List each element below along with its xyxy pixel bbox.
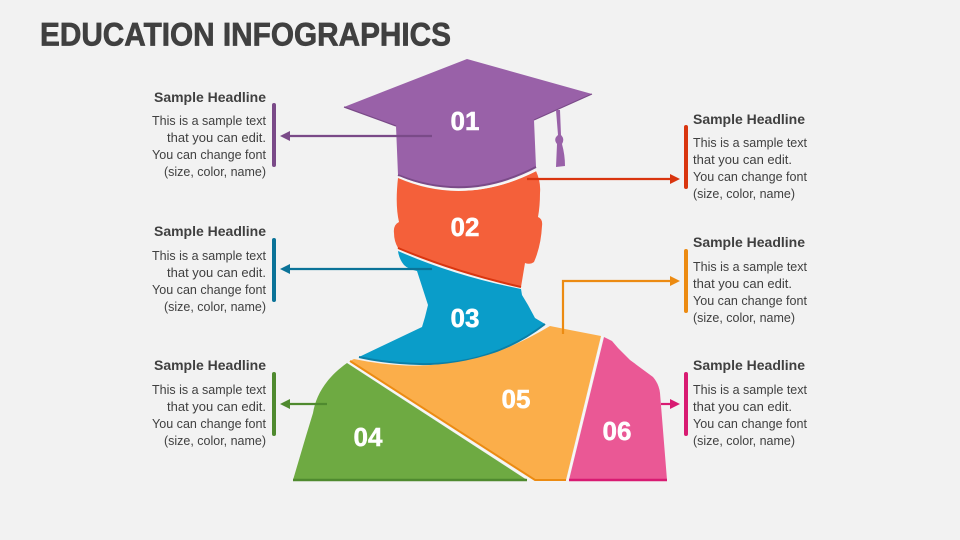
- text block 05: This is a sample text: [693, 259, 807, 274]
- text block 03: You can change font: [152, 282, 266, 297]
- text block 04: You can change font: [152, 416, 266, 431]
- text block 01: This is a sample text: [152, 113, 266, 128]
- text block 03: This is a sample text: [152, 248, 266, 263]
- arrow 03: [280, 264, 432, 274]
- text block 05: You can change font: [693, 293, 807, 308]
- segment 06: right shoulder: 06: [603, 416, 631, 446]
- text block 01: that you can edit.: [167, 130, 266, 145]
- arrow 02: [527, 174, 680, 184]
- segment 03: neck: [359, 251, 545, 364]
- text block 01: You can change font: [152, 147, 266, 162]
- text block 05: Sample Headline: [693, 234, 805, 250]
- text block 02: that you can edit.: [693, 152, 792, 167]
- text block 02: You can change font: [693, 169, 807, 184]
- text block 06: [684, 357, 807, 448]
- segment 01: graduation cap: 01: [451, 106, 479, 136]
- text block 04: (size, color, name): [164, 433, 266, 448]
- segment 04: left shoulder: [293, 363, 527, 480]
- text block 02: (size, color, name): [693, 186, 795, 201]
- segment 05: chest: [350, 326, 601, 480]
- segment 02: face: [394, 171, 542, 287]
- text block 01: [152, 89, 276, 179]
- text block 05: [684, 234, 807, 325]
- segment 02: face: 02: [451, 212, 479, 242]
- graduate figure: [293, 59, 667, 480]
- text block 02: Sample Headline: [693, 111, 805, 127]
- arrow 05: [563, 276, 680, 334]
- text block 06: This is a sample text: [693, 382, 807, 397]
- text block 03: that you can edit.: [167, 265, 266, 280]
- text block 05: that you can edit.: [693, 276, 792, 291]
- icon: tassel: [555, 110, 565, 167]
- segment 03: neck: 03: [451, 303, 479, 333]
- text block 03: Sample Headline: [154, 223, 266, 239]
- text block 05: (size, color, name): [693, 310, 795, 325]
- text block 01: (size, color, name): [164, 164, 266, 179]
- title: EDUCATION INFOGRAPHICS: [40, 17, 451, 53]
- text block 03: [152, 223, 276, 314]
- text block 06: You can change font: [693, 416, 807, 431]
- text block 01: Sample Headline: [154, 89, 266, 105]
- text block 04: This is a sample text: [152, 382, 266, 397]
- text block 02: This is a sample text: [693, 135, 807, 150]
- segment 04: left shoulder: 04: [354, 422, 383, 452]
- text block 04: that you can edit.: [167, 399, 266, 414]
- text block 06: that you can edit.: [693, 399, 792, 414]
- arrow 01: [280, 131, 432, 141]
- segment 06: right shoulder: [569, 337, 667, 480]
- text block 04: [152, 357, 276, 448]
- text block 06: Sample Headline: [693, 357, 805, 373]
- segment 01: graduation cap: [344, 59, 592, 190]
- arrow 04: [280, 399, 327, 409]
- text block 04: Sample Headline: [154, 357, 266, 373]
- text block 06: (size, color, name): [693, 433, 795, 448]
- arrow 06: [661, 399, 680, 409]
- text block 03: (size, color, name): [164, 299, 266, 314]
- text block 02: [684, 111, 807, 201]
- segment 05: chest: 05: [502, 384, 530, 414]
